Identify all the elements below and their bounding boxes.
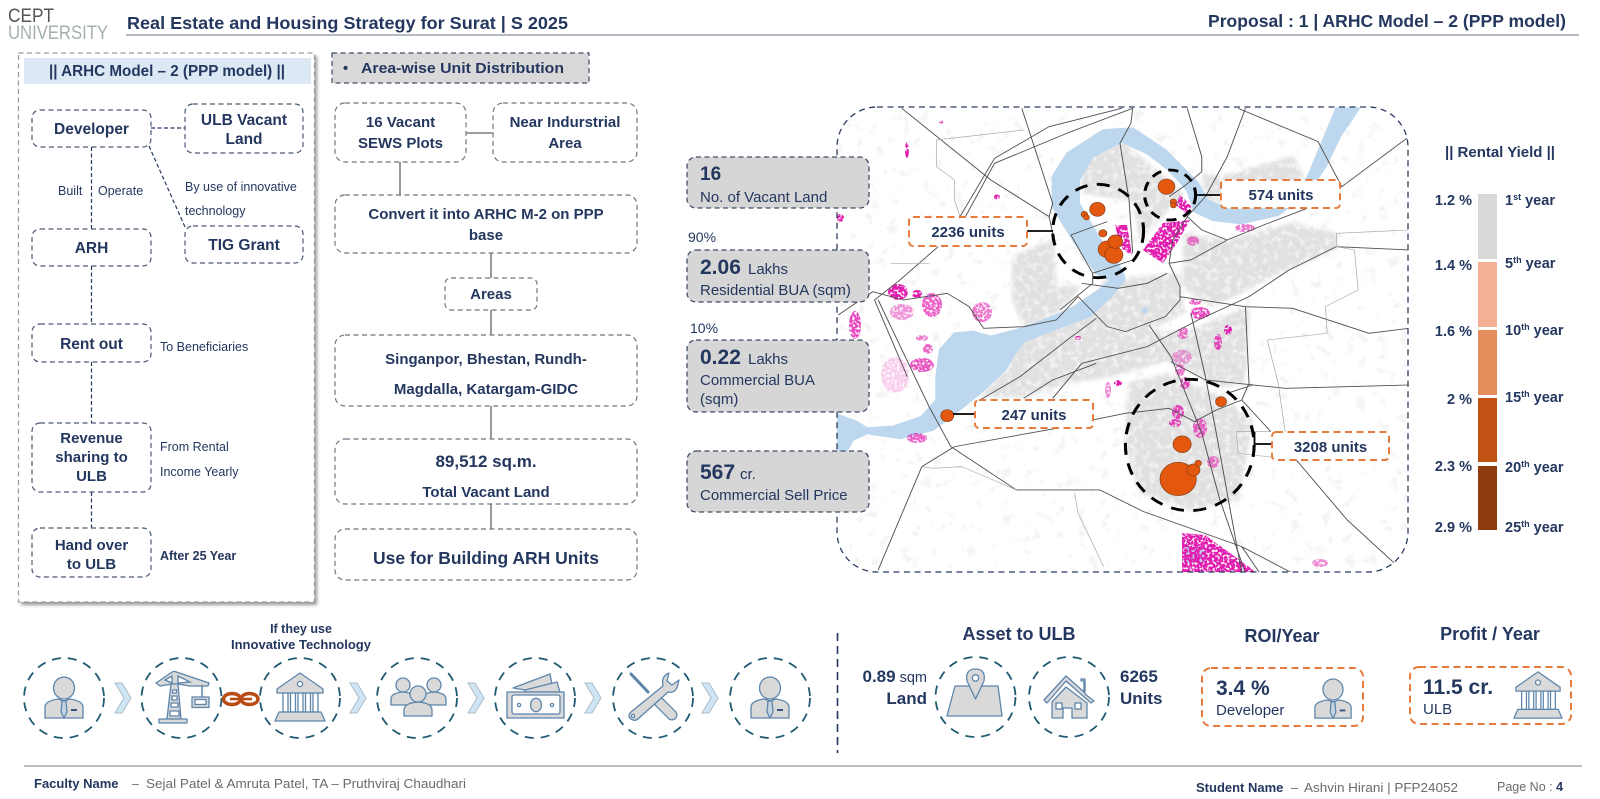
profit value: ULB [1423, 701, 1452, 718]
year labels: st [1513, 192, 1521, 202]
year labels: year [1530, 323, 1564, 339]
stat card: commercial BUA: Commercial BUA [700, 372, 815, 389]
node: revenue sharing: ULB [76, 468, 107, 485]
heading: area-wise [332, 53, 589, 83]
stat card: commercial BUA [687, 340, 869, 412]
stat card: commercial BUA: 0.22 [700, 346, 741, 369]
roads [838, 108, 1409, 577]
year labels: th [1513, 255, 1522, 265]
stat card: vacant land: No. of Vacant Land [700, 189, 827, 206]
box: convert: base [469, 227, 503, 244]
note: after 25 year: After 25 Year [160, 549, 236, 563]
box: total vacant land [335, 439, 637, 504]
caption: innovative technology: Innovative Technology [231, 638, 371, 652]
yield percentages: 2.9 % [1435, 520, 1472, 536]
stat card: vacant land [687, 157, 869, 208]
icon: land plot pin [936, 657, 1016, 737]
footer: student: – [1291, 781, 1298, 795]
label: 10%: 10% [690, 320, 718, 336]
ROI value: 3.4 % [1216, 677, 1270, 700]
map label: 247 units: 247 units [1001, 407, 1067, 424]
box: convert [335, 195, 637, 253]
yield percentages: 1.4 % [1435, 258, 1472, 274]
heading: area-wise: Area-wise Unit Distribution [361, 61, 564, 77]
year labels: year [1530, 520, 1564, 536]
map label: 574 units: 574 units [1248, 187, 1314, 204]
box: area names: Singanpor, Bhestan, Rundh- [385, 351, 587, 368]
ROI heading: ROI/Year [1244, 626, 1320, 646]
yield percentages: 2 % [1447, 392, 1472, 408]
year labels: th [1521, 519, 1530, 529]
profit per year [1410, 624, 1571, 724]
footer: student [1196, 780, 1458, 795]
year labels: year [1530, 460, 1564, 476]
chevron [115, 683, 131, 713]
year labels: 1 [1505, 193, 1513, 209]
ROI value: Developer [1216, 702, 1284, 719]
flow labels: built, operate: Built [58, 184, 83, 198]
map of Surat [836, 107, 1409, 577]
year labels: th [1521, 322, 1530, 332]
footer: faculty: – [132, 777, 139, 791]
icon: house [1029, 657, 1109, 737]
header: logo [8, 5, 108, 44]
note: rental income: From Rental [160, 440, 229, 454]
node: rent out [32, 324, 151, 362]
node: ULB vacant land: Land [225, 131, 263, 148]
stat card: commercial BUA: (sqm) [700, 391, 738, 408]
box: vacant plots [335, 103, 466, 162]
box: area names [335, 335, 637, 406]
rental yield heading: || Rental Yield || [1445, 145, 1555, 161]
stat card: sell price: Commercial Sell Price [700, 487, 848, 504]
stat card: sell price [687, 451, 869, 512]
heading: area-wise: • [343, 61, 348, 77]
year labels [1505, 192, 1564, 536]
note: to beneficiaries: To Beneficiaries [160, 340, 248, 354]
box: area names: Magdalla, Katargam-GIDC [394, 381, 578, 398]
colour bar [1478, 194, 1497, 530]
map label: 2236 units [909, 217, 1027, 246]
map label: 2236 units: 2236 units [931, 224, 1005, 241]
header: title: Real Estate and Housing Strategy for Surat | S 2025 [127, 13, 568, 33]
node: rent out: Rent out [60, 336, 123, 353]
year labels: 20 [1505, 460, 1521, 476]
icon: money [495, 658, 575, 738]
box: total vacant land: Total Vacant Land [422, 484, 550, 501]
node: ARH: ARH [75, 240, 108, 257]
flow labels: built, operate: Operate [98, 184, 143, 198]
icon: developer [1315, 679, 1351, 718]
chevron [350, 683, 366, 713]
chevron [468, 683, 484, 713]
land value: Land [886, 689, 927, 708]
panel: ARHC model flow [18, 53, 317, 605]
icon: chain link [224, 694, 258, 704]
ROI value [1216, 677, 1284, 719]
profit value: 11.5 cr. [1423, 676, 1493, 699]
box: areas: Areas [470, 286, 512, 303]
note: innovative technology: By use of innovative [185, 180, 297, 194]
profit value [1423, 676, 1493, 718]
unit bubbles [941, 179, 1227, 496]
box: vacant plots: SEWS Plots [358, 135, 443, 152]
year labels: 25 [1505, 520, 1521, 536]
year labels: 5 [1505, 256, 1513, 272]
note: innovative technology [185, 180, 297, 218]
year labels: year [1530, 390, 1564, 406]
icon: developer [24, 658, 104, 738]
asset heading: Asset to ULB [962, 624, 1076, 644]
stat card: residential BUA [687, 250, 869, 302]
yield percentages: 2.3 % [1435, 459, 1472, 475]
ROI per year [1202, 626, 1363, 726]
profit heading: Profit / Year [1440, 624, 1540, 644]
map label: 3208 units [1272, 432, 1389, 460]
river Tapi [838, 108, 1359, 563]
map label: 3208 units: 3208 units [1294, 439, 1367, 456]
footer: faculty: Faculty Name [34, 776, 119, 791]
node: TIG grant: TIG Grant [208, 237, 280, 254]
stat card: commercial BUA: Lakhs [748, 351, 788, 368]
box: near industrial area [493, 103, 637, 162]
year labels: 15 [1505, 390, 1521, 406]
box: convert: Convert it into ARHC M-2 on PPP [368, 206, 604, 223]
label: 90%: 90% [688, 229, 716, 245]
node: ULB vacant land: ULB Vacant [201, 112, 287, 129]
icon: ULB bank [260, 658, 340, 738]
note: rental income: Income Yearly [160, 465, 239, 479]
node: ULB vacant land [185, 104, 303, 153]
year labels: year [1521, 193, 1555, 209]
map label: 247 units [975, 400, 1093, 428]
icon: tools [613, 658, 693, 738]
box: use for building: Use for Building ARH Units [373, 548, 599, 568]
footer: student: Student Name [1196, 780, 1283, 795]
unit value: 6265 [1120, 667, 1158, 686]
chevron [585, 683, 601, 713]
yield percentages: 1.6 % [1435, 324, 1472, 340]
stat card: sell price: cr. [740, 466, 756, 483]
node: developer: Developer [54, 121, 129, 138]
icon: handover person [730, 658, 810, 738]
box: near industrial area: Near Indurstrial [510, 114, 620, 131]
stat card: vacant land: 16 [700, 164, 721, 185]
chevron [702, 683, 718, 713]
yield percentages: 1.2 % [1435, 193, 1472, 209]
note: rental income [160, 440, 239, 479]
box: total vacant land: 89,512 sq.m. [435, 452, 537, 471]
node: revenue sharing: Revenue [60, 430, 123, 447]
box: areas [445, 278, 537, 310]
footer: student: Ashvin Hirani | PFP24052 [1304, 781, 1458, 795]
header: proposal label: Proposal : 1 | ARHC Model – 2 (PPP model) [1208, 11, 1566, 31]
land value: 0.89 sqm [862, 667, 927, 686]
node: hand over [32, 528, 151, 577]
footer: faculty: Sejal Patel & Amruta Patel, TA – Pruthviraj Chaudhari [146, 777, 466, 791]
header: logo: CEPT [8, 5, 54, 27]
icon: beneficiaries [377, 658, 457, 738]
node: hand over: to ULB [67, 556, 116, 573]
pink industrial zones [837, 120, 1328, 572]
dashed cluster circles [1053, 170, 1254, 511]
node: revenue sharing: sharing to [55, 449, 128, 466]
stat card: residential BUA: 2.06 [700, 256, 741, 279]
note: innovative technology: technology [185, 204, 246, 218]
caption: innovative technology [231, 622, 371, 652]
year labels: 10 [1505, 323, 1521, 339]
node: ARH [32, 229, 151, 266]
year labels: th [1521, 459, 1530, 469]
node: revenue sharing [32, 423, 151, 492]
icon: bank [1514, 672, 1562, 718]
node: TIG grant [185, 226, 303, 263]
box: use for building [335, 529, 637, 580]
asset to ULB [862, 624, 1162, 737]
process flow icons [24, 622, 810, 738]
node: hand over: Hand over [55, 537, 128, 554]
year labels: year [1522, 256, 1556, 272]
box: vacant plots: 16 Vacant [366, 114, 435, 131]
unit value: Units [1120, 689, 1162, 708]
footer: page number: Page No : 4 [1497, 780, 1563, 794]
footer: faculty [34, 776, 466, 791]
node: developer [32, 110, 151, 147]
yield percentages [1435, 193, 1472, 536]
unit value [1120, 667, 1162, 708]
land value [862, 667, 927, 708]
icon: crane [142, 658, 222, 738]
panel heading: || ARHC Model – 2 (PPP model) || [49, 63, 285, 80]
caption: innovative technology: If they use [270, 622, 332, 636]
header: logo: UNIVERSITY [8, 23, 108, 44]
year labels: th [1521, 389, 1530, 399]
stat card: residential BUA: Lakhs [748, 261, 788, 278]
flow labels: built, operate [58, 184, 143, 198]
rental yield scale [1435, 145, 1564, 536]
panel: area-wise unit distribution [332, 53, 637, 580]
map label: 574 units [1221, 180, 1340, 208]
stat card: sell price: 567 [700, 461, 735, 484]
stat card: residential BUA: Residential BUA (sqm) [700, 282, 851, 299]
box: near industrial area: Area [548, 135, 582, 152]
